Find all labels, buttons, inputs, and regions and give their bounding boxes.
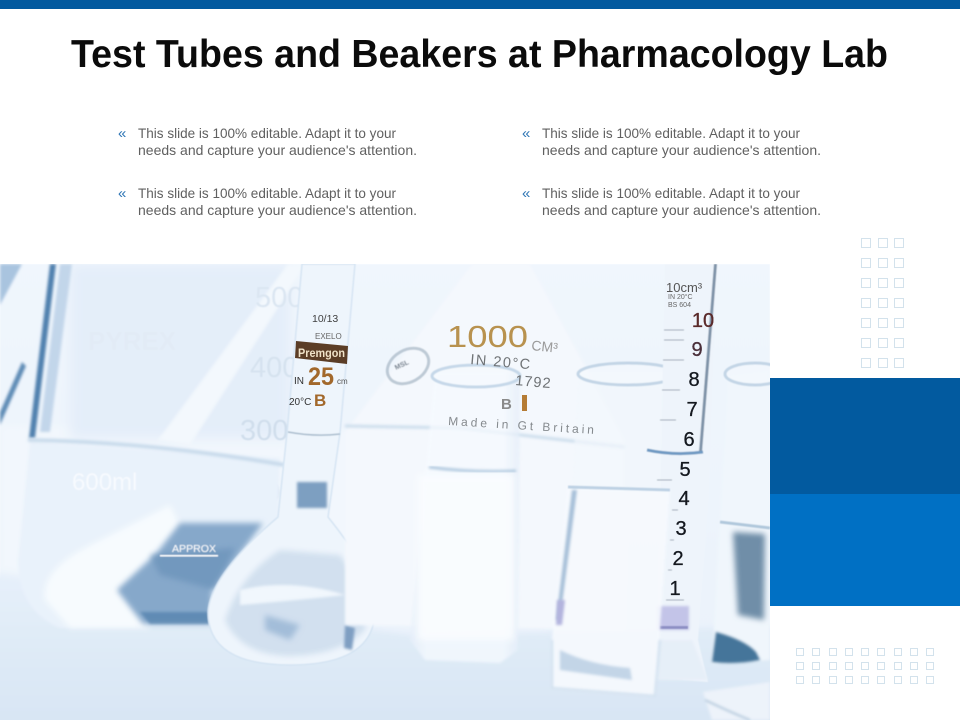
large beaker with liquid	[18, 264, 285, 628]
graduated cylinder scale numbers: 9	[691, 339, 703, 361]
conical flask label text: 1792	[515, 373, 552, 392]
bullet 4: needs and capture your audience's attention.	[542, 203, 821, 218]
graduated cylinder scale numbers: 5	[679, 459, 691, 481]
graduated cylinder scale numbers: 7	[686, 399, 698, 421]
bullet 3: This slide is 100% editable. Adapt it to your	[138, 186, 396, 201]
graduated cylinder scale numbers: 3	[675, 518, 687, 540]
graduated cylinder scale numbers: 4	[678, 488, 690, 510]
bullet 2: «	[522, 125, 530, 142]
dark blue band	[770, 378, 960, 494]
glass cylinder right with dark liquid	[710, 361, 770, 665]
bullet 3	[118, 185, 417, 218]
flask label text: IN	[294, 376, 304, 387]
conical flask label text: CM³	[531, 337, 559, 356]
conical flask label text: IN 20°C	[470, 352, 532, 373]
photo: lab glassware	[0, 264, 790, 720]
graduated cylinder scale numbers	[666, 280, 714, 600]
flask label text: 25	[308, 363, 334, 391]
flask label text: B	[314, 391, 326, 410]
flask label text: Premgon	[298, 348, 345, 360]
graduated cylinder scale numbers: 10	[692, 310, 714, 332]
photo background	[0, 264, 790, 720]
back beaker and glass rod: 400	[250, 352, 298, 384]
flask label text: cm	[337, 377, 348, 386]
title: Test Tubes and Beakers at Pharmacology Lab	[71, 33, 888, 76]
volumetric flask	[208, 264, 375, 665]
dark patch under beaker: APPROX	[172, 543, 216, 555]
bullet 2: needs and capture your audience's attention.	[542, 143, 821, 158]
glass cylinder left	[410, 365, 520, 663]
conical flask label text: Made in Gt Britain	[448, 414, 594, 437]
bullet 1: «	[118, 125, 126, 142]
bullet 2	[522, 125, 821, 158]
dot grid: upper right	[862, 238, 904, 368]
flask label text: 10/13	[312, 313, 338, 325]
bullet 2: This slide is 100% editable. Adapt it to your	[542, 126, 800, 141]
back beaker and glass rod: 300	[240, 415, 288, 447]
glass cylinder back	[574, 361, 664, 448]
bullet 4: This slide is 100% editable. Adapt it to your	[542, 186, 800, 201]
conical flask label text: 1000	[447, 319, 528, 354]
back beaker and glass rod: 200	[232, 477, 280, 509]
graduated cylinder body	[647, 264, 717, 682]
dot grid: lower right	[796, 648, 934, 684]
back beaker and glass rod: PYREX	[88, 326, 177, 356]
glass in lower right corner	[703, 682, 770, 720]
bullet 1: This slide is 100% editable. Adapt it to your	[138, 126, 396, 141]
graduated cylinder scale numbers: 6	[683, 429, 695, 451]
dark patch under beaker	[117, 523, 263, 624]
conical flask 1000 cm3: MSL	[394, 359, 411, 372]
flask label text	[289, 313, 348, 410]
conical flask label text	[447, 319, 594, 437]
glass cylinder front	[552, 487, 670, 696]
graduated cylinder scale numbers: BS 604	[668, 302, 691, 309]
graduated cylinder scale numbers: IN 20°C	[668, 293, 693, 301]
bullet 3: needs and capture your audience's attention.	[138, 203, 417, 218]
bullet 3: «	[118, 185, 126, 202]
bullet 4: «	[522, 185, 530, 202]
back beaker and glass rod	[0, 264, 306, 509]
graduated cylinder scale numbers: 2	[672, 548, 684, 570]
graduated cylinder scale numbers: 10cm³	[666, 280, 703, 295]
graduated cylinder scale numbers: 1	[669, 578, 681, 600]
top bar	[0, 0, 960, 9]
bright blue band	[770, 494, 960, 606]
graduated cylinder scale numbers: 8	[688, 369, 700, 391]
flask label text: 20°C	[289, 397, 311, 408]
conical flask label text: B	[501, 396, 512, 413]
bullet list	[118, 125, 821, 218]
large beaker with liquid: 600ml	[72, 469, 137, 496]
back beaker and glass rod: 500	[255, 282, 303, 314]
conical flask 1000 cm3	[344, 346, 576, 627]
bullet 4	[522, 185, 821, 218]
bullet 1	[118, 125, 417, 158]
flask label text: EXELO	[315, 332, 342, 341]
bullet 1: needs and capture your audience's attention.	[138, 143, 417, 158]
